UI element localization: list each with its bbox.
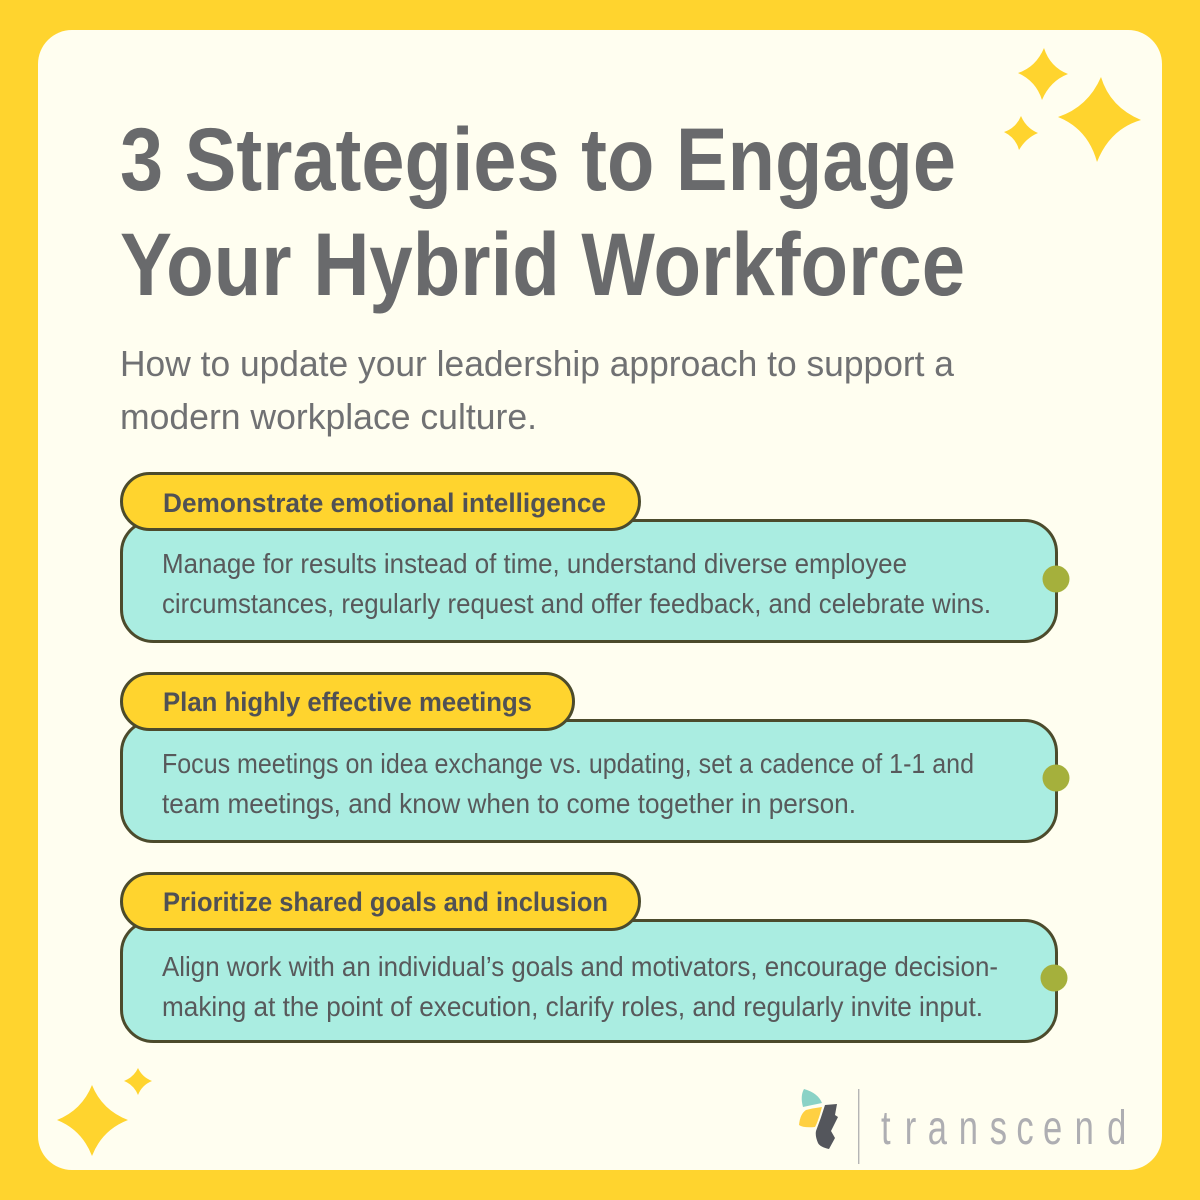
logo wordmark: transcend [881,1100,1126,1154]
card body 3 [122,920,1056,1042]
heading pill 3 [122,874,640,930]
card body 2 [122,720,1056,842]
description 3: Align work with an individual’s goals and motivators, encourage decision- [162,951,998,982]
description 1: Manage for results instead of time, understand diverse employee [162,548,907,579]
description 1: circumstances, regularly request and offer feedback, and celebrate wins. [162,588,991,619]
dot 1 [1042,566,1070,592]
heading 3: Prioritize shared goals and inclusion [163,887,608,917]
icon: logo mark [799,1089,838,1149]
description 1 [162,548,991,619]
icon: sparkles top right [1004,48,1141,162]
description 3 [162,951,998,1022]
heading 2: Plan highly effective meetings [163,687,532,717]
title: Your Hybrid Workforce [120,214,965,314]
dot 2 [1042,764,1070,792]
panel: demonstrate emotional intelligence [122,474,1070,642]
heading 1: Demonstrate emotional intelligence [163,488,606,518]
logo: transcend [799,1089,1126,1164]
card body 1 [122,520,1056,642]
subtitle: modern workplace culture. [120,396,537,437]
title: 3 Strategies to Engage [120,109,956,209]
icon: sparkles bottom left [57,1068,152,1156]
description 3: making at the point of execution, clarify roles, and regularly invite input. [162,991,983,1022]
dot 3 [1040,964,1068,992]
description 2: team meetings, and know when to come together in person. [162,788,856,819]
subtitle [120,343,955,437]
heading pill 1 [122,474,640,530]
description 2: Focus meetings on idea exchange vs. updating, set a cadence of 1-1 and [162,748,974,779]
logo divider [858,1089,859,1164]
panel: plan highly effective meetings [122,674,1070,842]
heading pill 2 [122,674,574,730]
title [120,109,965,314]
panel: prioritize shared goals and inclusion [122,874,1068,1042]
description 2 [162,748,974,819]
subtitle: How to update your leadership approach to support a [120,343,955,384]
